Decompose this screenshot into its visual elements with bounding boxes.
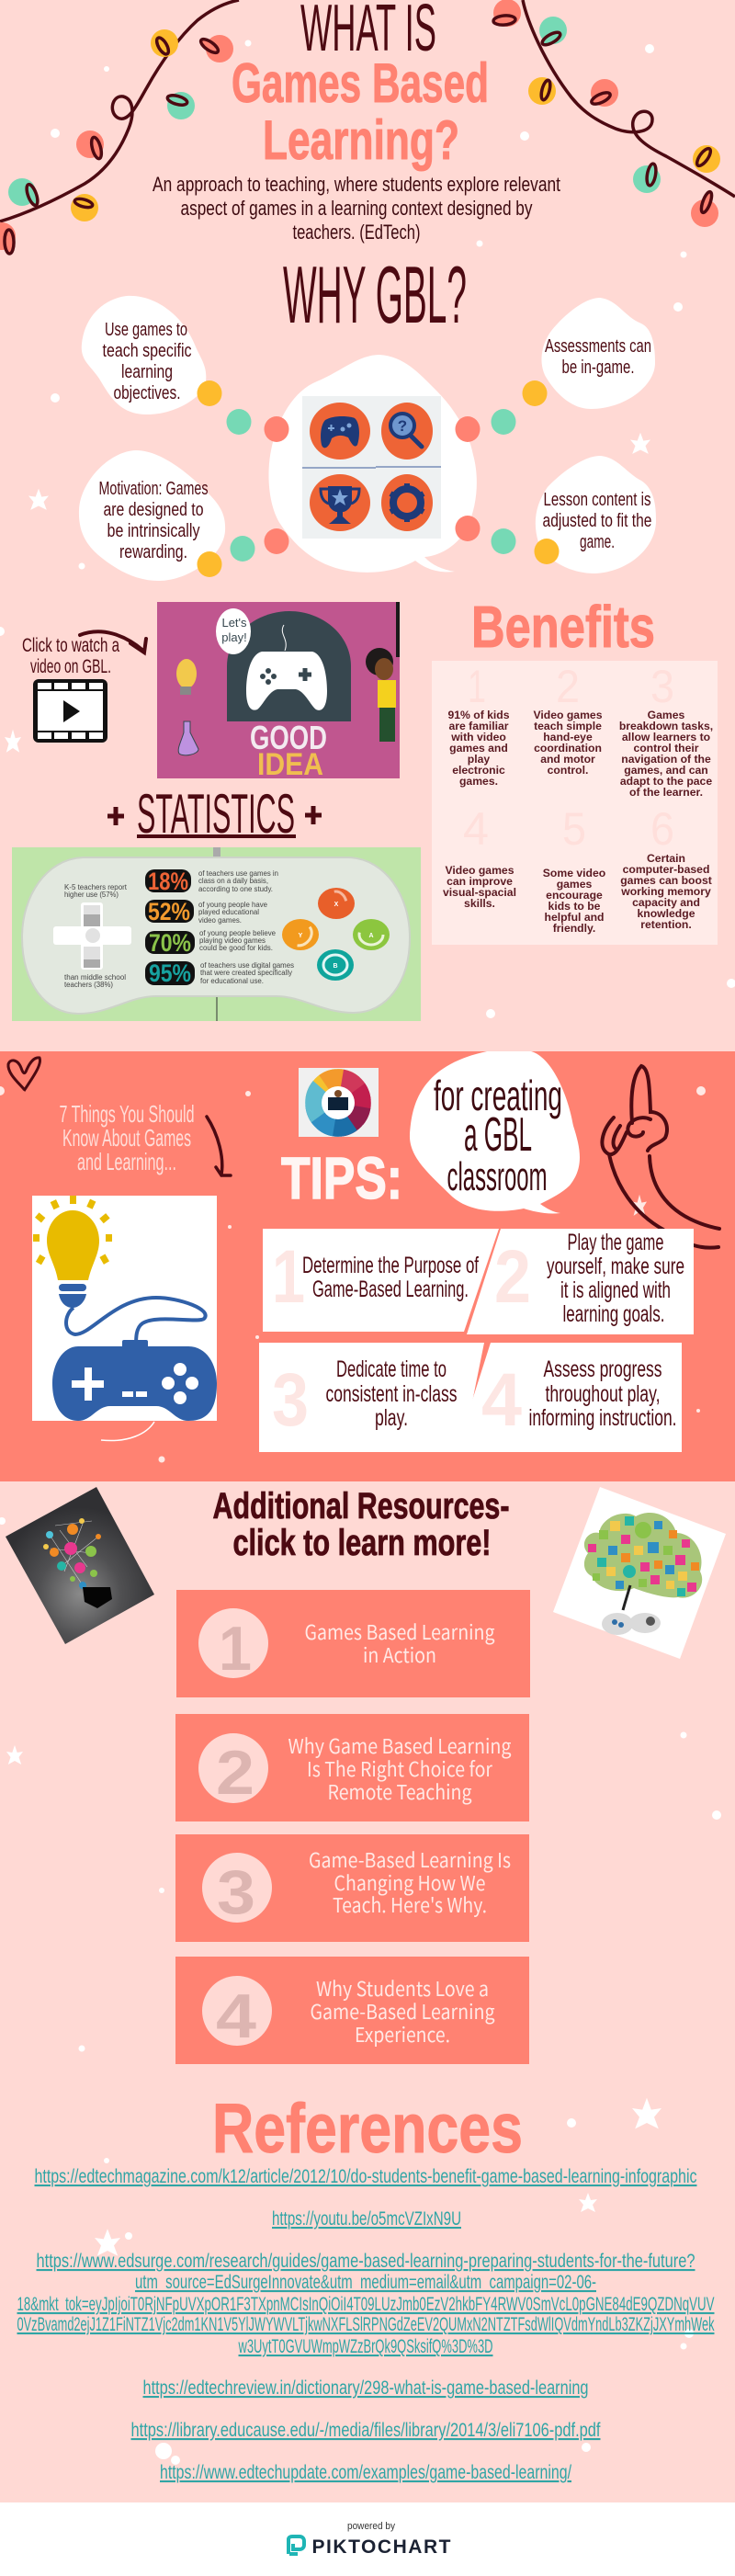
right string of lights — [493, 0, 735, 227]
tip card 2 — [467, 1229, 694, 1334]
tip card 3: play. — [375, 1405, 408, 1431]
benefit 1 — [447, 661, 510, 788]
stat: 52%: video games. — [198, 916, 242, 925]
resource button 2: 2 — [216, 1738, 254, 1808]
tip card 4: 4 — [481, 1358, 522, 1442]
benefit 6: computer-based — [623, 863, 709, 876]
stat: 52%: 52% — [148, 898, 190, 925]
blob: lesson content: game. — [580, 532, 615, 552]
speech bubble: let's play: play! — [221, 630, 247, 644]
tip card 2: 2 — [494, 1235, 531, 1319]
benefit 3: adapt to the pace — [620, 775, 712, 788]
benefit 2 — [534, 661, 603, 777]
icon: heart — [8, 1058, 40, 1091]
benefit 5: helpful and — [544, 911, 605, 924]
benefit 6: Certain — [647, 852, 685, 865]
benefit 1: games. — [459, 775, 498, 788]
blob: learning objectives: Use games to — [105, 320, 187, 340]
tip card 1 — [263, 1229, 499, 1332]
benefit 1: electronic — [452, 764, 505, 777]
blob: motivation: be intrinsically — [107, 521, 200, 541]
icon: gamepad — [310, 403, 370, 460]
stat: 18%: of teachers use games in — [198, 869, 278, 878]
arrow to video — [80, 631, 146, 653]
benefit 2: teach simple — [534, 720, 602, 732]
definition paragraph: aspect of games in a learning context designed by — [180, 197, 533, 220]
blob: motivation: Motivation: Games — [99, 479, 208, 499]
stat: 95%: for educational use. — [200, 977, 264, 985]
benefit 1: 1 — [468, 661, 486, 712]
benefit 2: Video games — [534, 709, 603, 721]
stat: 95% — [145, 959, 294, 987]
resource button 2: Why Game Based Learning — [288, 1731, 512, 1760]
tip card 1: 1 — [272, 1235, 305, 1319]
resource button 2: Remote Teaching — [327, 1776, 472, 1806]
blob: motivation: rewarding. — [119, 542, 187, 562]
blob: assessments: be in-game. — [562, 357, 634, 378]
blob: motivation — [79, 450, 225, 581]
white controller — [246, 652, 327, 710]
stat: 52% — [145, 898, 268, 925]
heading: additional resources — [213, 1486, 509, 1563]
tip card 3: 3 — [272, 1358, 309, 1442]
statistics controller image — [12, 847, 421, 1021]
central blob — [268, 355, 477, 573]
icon: film strip play button — [33, 679, 107, 743]
benefit 4: Video games — [446, 864, 514, 877]
stat: 95%: of teachers use digital games — [200, 961, 294, 970]
benefit 2: 2 — [556, 661, 580, 712]
image: network lightbulb — [6, 1487, 154, 1644]
heading: additional resources: click to learn more! — [233, 1523, 491, 1563]
heading: statistics: STATISTICS — [137, 783, 295, 845]
icon grid — [302, 396, 441, 539]
benefit 3: navigation of the — [621, 753, 711, 766]
benefit 3: control their — [633, 742, 699, 755]
blob: learning objectives: objectives. — [114, 383, 180, 403]
tip card 1: Determine the Purpose of — [302, 1253, 479, 1278]
pointing hand — [602, 1066, 719, 1248]
benefit 4: visual-spacial — [443, 886, 516, 899]
footer — [0, 2502, 735, 2576]
stat: 95%: that were created specifically — [200, 969, 292, 977]
benefit 3: of the learner. — [629, 786, 703, 799]
icon: gear — [381, 474, 433, 531]
speech bubble: let's play — [216, 608, 251, 654]
reference links: https://edtechreview.in/dictionary/298-what-is-game-based-learning — [143, 2377, 588, 2399]
link text: 7 things: Know About Games — [62, 1124, 191, 1152]
arrow down — [207, 1117, 231, 1175]
link text: 7 things — [59, 1100, 195, 1175]
benefit 2: hand-eye — [543, 731, 593, 743]
benefit 4: can improve — [447, 875, 513, 888]
benefit 3: Games — [648, 709, 685, 721]
footer: PIKTOCHART — [312, 2536, 451, 2558]
reference links: https://library.educause.edu/-/media/files/library/2014/3/eli7106-pdf.pdf — [130, 2420, 601, 2441]
stat: 18%: 18% — [148, 868, 188, 895]
d-pad — [53, 902, 131, 970]
video thumbnail: good idea: IDEA — [257, 747, 323, 782]
text: WHY GBL? — [283, 249, 467, 340]
speech bubble: for creating a GBL classroom: classroom — [447, 1154, 548, 1199]
resource button 3: Teach. Here's Why. — [333, 1889, 487, 1919]
resource button 1: 1 — [219, 1614, 252, 1684]
resource button 1: in Action — [363, 1640, 436, 1669]
flask — [178, 721, 198, 755]
dome — [227, 611, 351, 721]
benefit 3: allow learners to — [622, 731, 710, 743]
definition paragraph — [153, 173, 560, 244]
resource button 1 — [176, 1590, 530, 1697]
benefit 3: breakdown tasks, — [619, 720, 713, 732]
tip card 3: consistent in-class — [325, 1381, 458, 1407]
benefit 3 — [619, 661, 713, 799]
reference links: w3UytT0GVUWmpWZzBrQk9QSksifQ%3D%3D — [238, 2336, 492, 2357]
benefit 2: control. — [548, 764, 588, 777]
definition paragraph: An approach to teaching, where students explore relevant — [153, 173, 560, 196]
reference links — [17, 2166, 715, 2483]
benefit 6: working memory — [620, 885, 711, 898]
title — [232, 0, 489, 171]
footer: powered by — [347, 2521, 395, 2532]
benefit 1: play — [468, 753, 490, 766]
title: Learning? — [263, 109, 459, 171]
benefit 5: kids to be — [548, 900, 601, 913]
d-pad captions: than middle school — [64, 973, 126, 982]
blob: lesson content: Lesson content is — [544, 490, 650, 510]
icon cloud — [584, 1513, 702, 1598]
speech bubble: for creating a GBL classroom — [410, 1051, 580, 1214]
blob: lesson content: adjusted to fit the — [542, 511, 652, 531]
benefit 5: friendly. — [553, 922, 595, 935]
tip card 4: Assess progress — [544, 1356, 662, 1382]
icon: magnifier question: ? — [398, 417, 407, 435]
stat: 70% — [145, 929, 277, 957]
benefits panel — [432, 661, 718, 945]
tip card 4 — [456, 1343, 682, 1452]
stat: 70%: of young people believe — [199, 929, 277, 937]
blob: learning objectives — [82, 296, 206, 414]
benefit 6 — [620, 803, 712, 931]
benefit 3: games, and can — [624, 764, 708, 777]
heading: tips: TIPS: — [281, 1145, 402, 1211]
video thumbnail: good idea — [157, 602, 400, 782]
controller buttons: A — [368, 933, 374, 939]
blob: lesson content — [536, 456, 656, 573]
d-pad captions: higher use (57%) — [64, 891, 119, 899]
video thumbnail: good idea: GOOD — [250, 719, 327, 756]
speech bubble: for creating a GBL classroom: for creating — [434, 1072, 562, 1119]
benefit 6: retention. — [640, 918, 692, 931]
controller buttons — [282, 888, 390, 981]
reference links: https://www.edtechupdate.com/examples/game-based-learning/ — [160, 2462, 571, 2483]
benefit 1: with video — [450, 731, 506, 743]
benefit 5: 5 — [562, 803, 586, 855]
tip card 2: learning goals. — [562, 1301, 665, 1327]
stat: 52%: played educational — [198, 908, 259, 916]
controller buttons: B — [333, 963, 338, 970]
blob: motivation: are designed to — [103, 500, 204, 520]
blob: learning objectives: teach specific — [103, 341, 191, 361]
benefit 5 — [543, 803, 605, 935]
resource button 1: Games Based Learning — [305, 1617, 495, 1646]
controller buttons: Y — [299, 933, 303, 939]
speech bubble: for creating a GBL classroom: a GBL — [464, 1108, 532, 1162]
benefit 1: 91% of kids — [447, 709, 510, 721]
link text: 7 things: and Learning... — [77, 1148, 176, 1175]
icon: magnifier question — [381, 403, 433, 460]
benefit 6: 6 — [650, 803, 674, 855]
blob: learning objectives: learning — [121, 362, 173, 382]
d-pad captions — [64, 883, 128, 989]
benefit 1: are familiar — [448, 720, 509, 732]
lightbulb — [176, 659, 197, 695]
definition paragraph: teachers. (EdTech) — [292, 221, 421, 244]
benefit 6: capacity and — [632, 896, 700, 909]
tips section specks — [0, 1086, 706, 1463]
tip card 3: Dedicate time to — [336, 1356, 447, 1382]
benefit 5: Some video — [543, 867, 605, 879]
resource button 4: Why Students Love a — [316, 1973, 489, 2003]
resource button 3: 3 — [217, 1857, 255, 1927]
benefit 5: encourage — [546, 889, 603, 902]
video link label: Click to watch a — [22, 635, 119, 656]
dots over central blob — [265, 416, 480, 554]
benefit 5: games — [557, 878, 593, 891]
d-pad captions: K-5 teachers report — [64, 883, 128, 891]
stat: 18%: according to one study. — [198, 885, 273, 893]
benefit 2: coordination — [534, 742, 602, 755]
benefit 4 — [443, 803, 516, 910]
tip card 1: Game-Based Learning. — [312, 1277, 469, 1302]
stat: 18% — [145, 868, 278, 895]
heading: references: References — [212, 2090, 523, 2168]
speech bubble: let's play: Let's — [221, 616, 247, 630]
stat: 52%: of young people have — [198, 901, 268, 909]
resource button 4: 4 — [216, 1981, 256, 2051]
resource button 2: Is The Right Choice for — [307, 1753, 492, 1783]
tip card 3 — [259, 1343, 484, 1452]
heading: statistics — [107, 783, 322, 845]
benefit 1: games and — [449, 742, 508, 755]
heading: benefits: Benefits — [471, 594, 655, 660]
stat: 95%: 95% — [149, 959, 191, 987]
character — [366, 602, 400, 742]
benefit 4: 4 — [463, 803, 489, 855]
resource button 4: Game-Based Learning — [311, 1996, 495, 2026]
stat: 70%: playing video games — [199, 936, 266, 945]
video link label: video on GBL. — [30, 656, 111, 677]
link text: 7 things: 7 Things You Should — [59, 1100, 195, 1128]
title: Games Based — [232, 52, 489, 114]
d-pad captions: teachers (38%) — [64, 981, 113, 989]
image: bulb and controller — [32, 1196, 217, 1421]
tip card 2: Play the game — [568, 1230, 663, 1255]
diagram: why GBL — [79, 296, 656, 581]
benefit 2: and motor — [540, 753, 595, 766]
resource button 4: Experience. — [355, 2019, 450, 2048]
tips section background — [0, 1051, 735, 1481]
heading: additional resources: Additional Resources- — [213, 1486, 509, 1526]
blob: assessments — [541, 298, 655, 409]
tip card 2: it is aligned with — [560, 1277, 671, 1303]
resource button 2 — [175, 1714, 529, 1821]
benefit 6: knowledge — [638, 907, 695, 920]
reference links: https://youtu.be/o5mcVZIxN9U — [272, 2208, 461, 2230]
resource button 3: Game-Based Learning Is — [309, 1844, 511, 1874]
stat: 70%: could be good for kids. — [199, 944, 273, 952]
resource button 3 — [175, 1834, 529, 1942]
tip card 4: informing instruction. — [529, 1405, 676, 1431]
resource button 4 — [175, 1957, 529, 2064]
image: icon cloud and controller — [553, 1487, 726, 1659]
blob: assessments: Assessments can — [545, 336, 651, 357]
video link label — [22, 635, 119, 677]
tip card 4: throughout play, — [546, 1381, 660, 1407]
stat: 70%: 70% — [149, 929, 191, 957]
connector dots — [197, 380, 559, 577]
icon: trophy — [310, 474, 370, 531]
resource button 3: Changing How We — [334, 1867, 485, 1897]
left string of lights — [0, 0, 239, 254]
stat: 18%: class on a daily basis, — [198, 877, 268, 885]
benefit 3: 3 — [650, 661, 674, 712]
piktochart logo mark — [288, 2536, 304, 2554]
benefit 6: games can boost — [620, 874, 712, 887]
controller buttons: X — [334, 902, 339, 908]
benefit 4: skills. — [464, 897, 495, 910]
image: learning wheel — [299, 1068, 379, 1138]
